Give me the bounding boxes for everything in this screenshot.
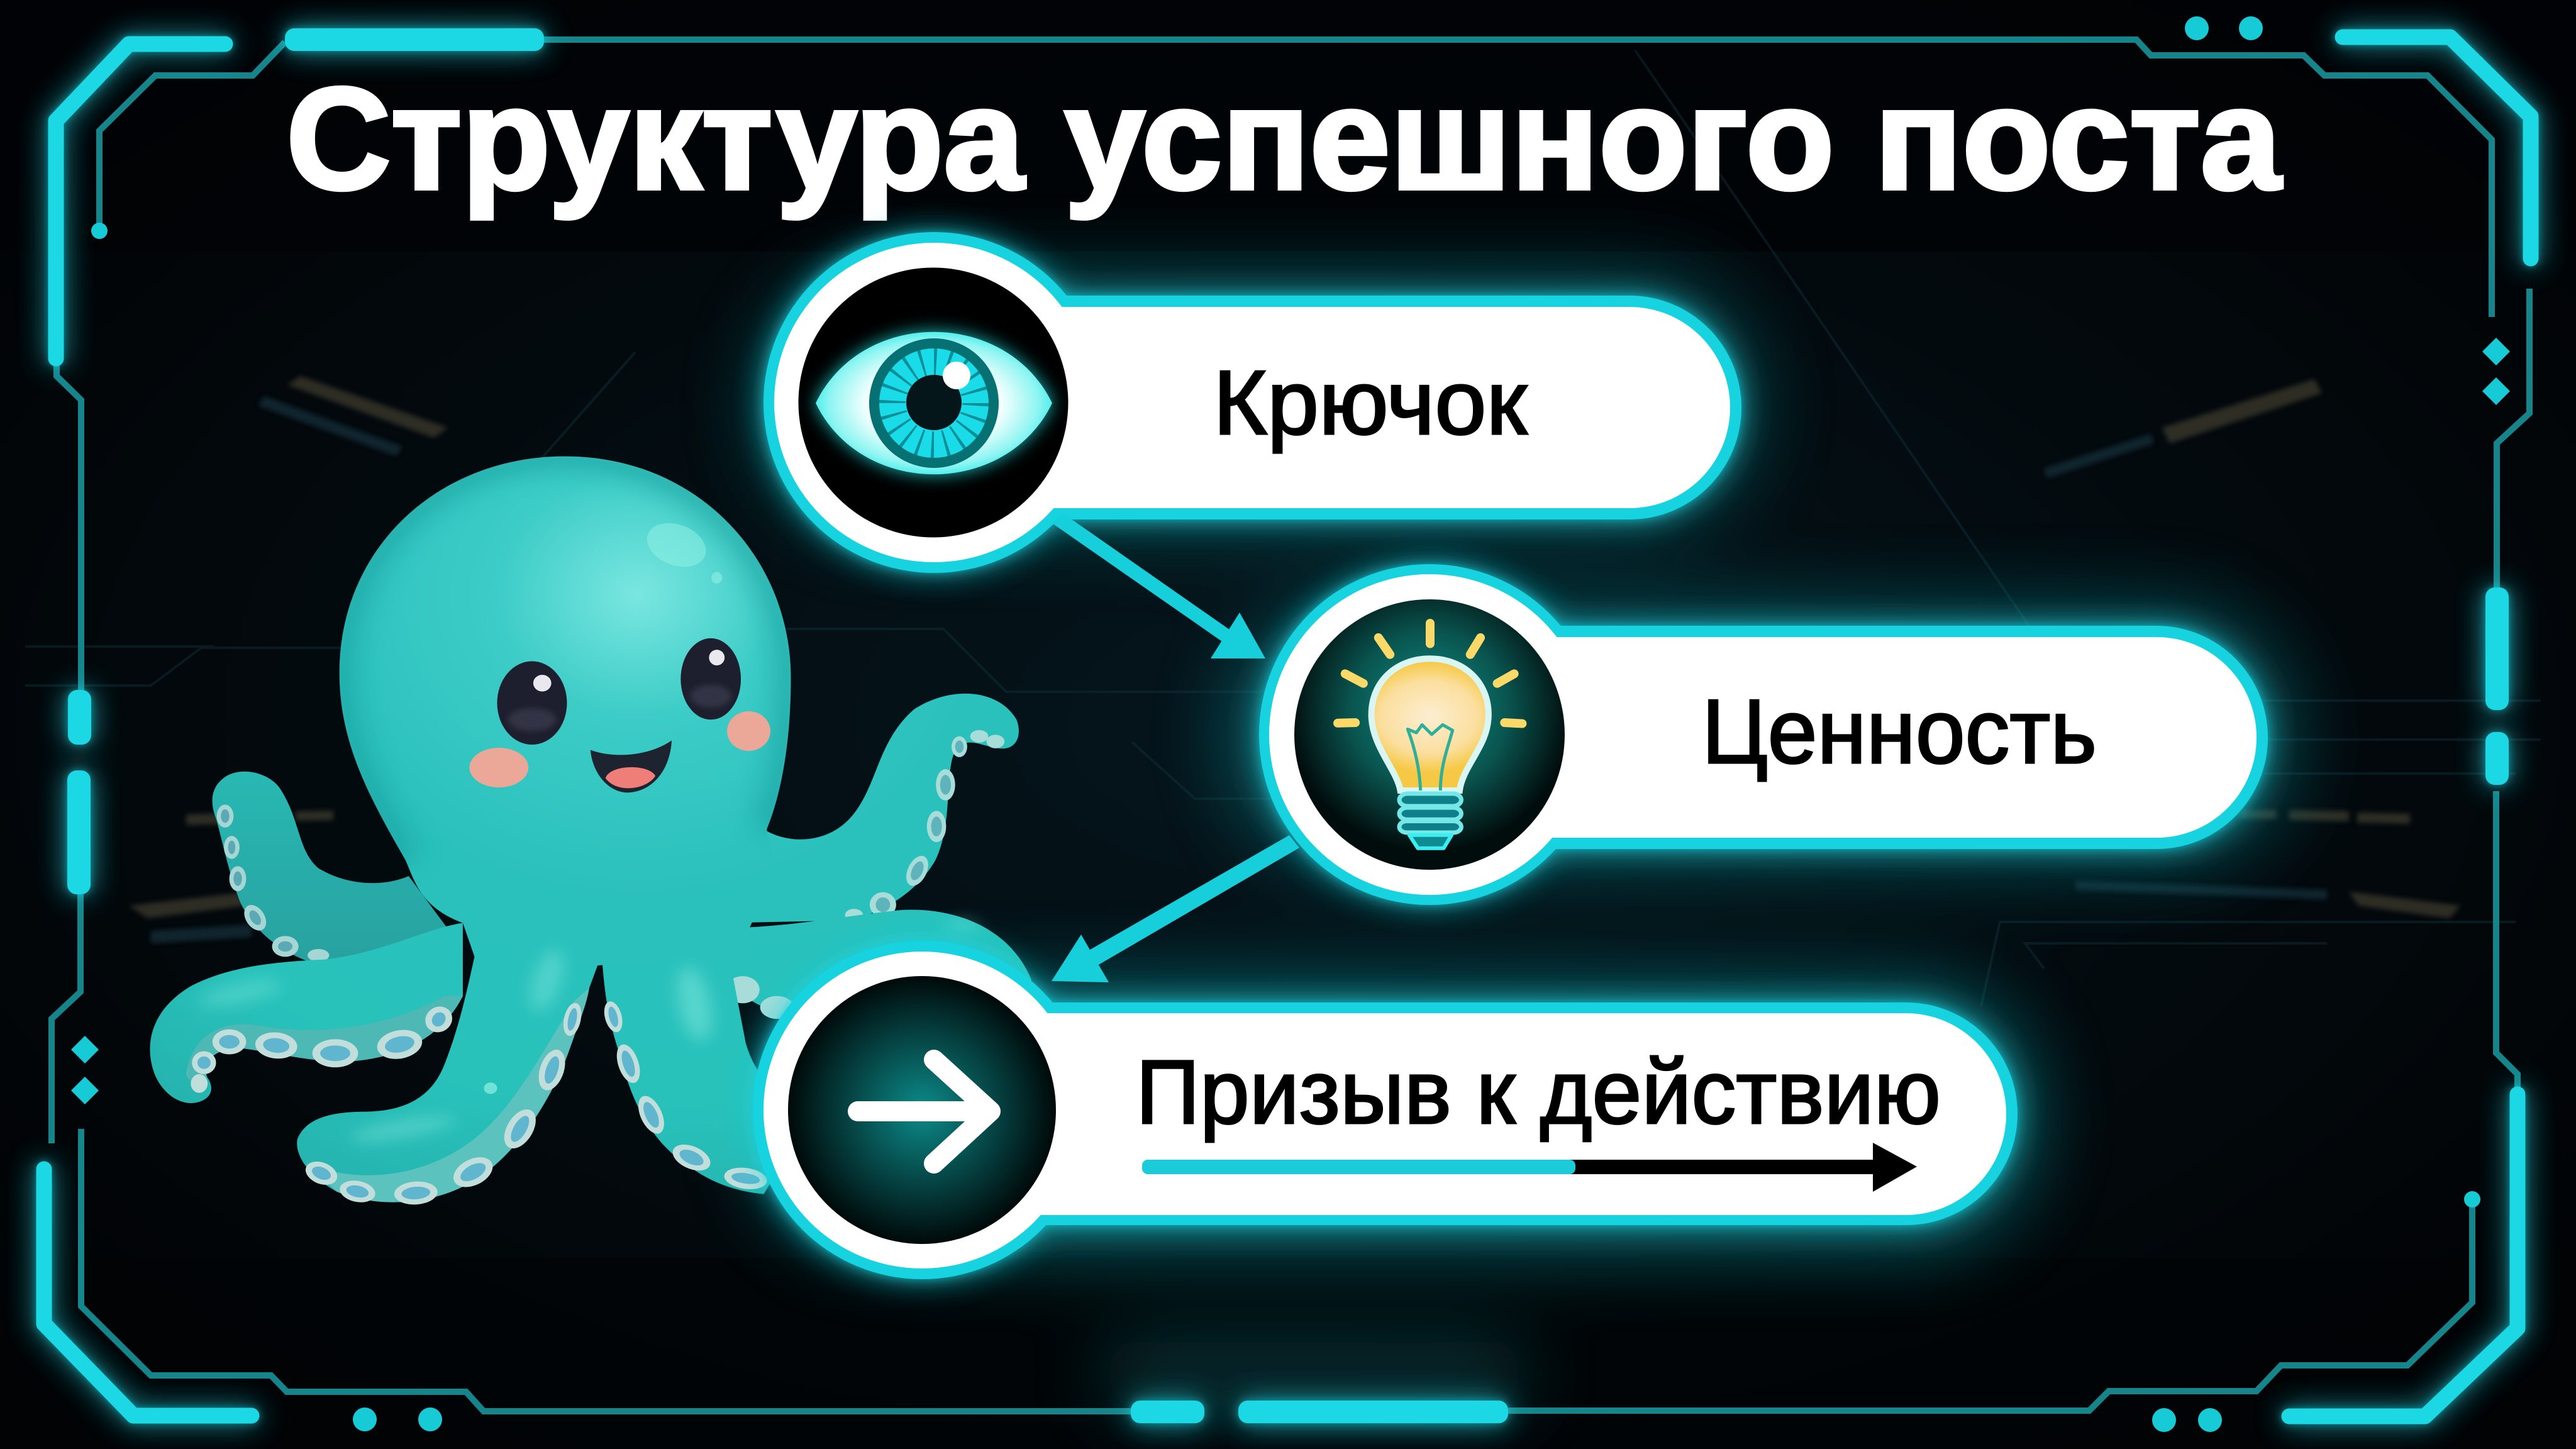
title: Структура успешного поста — [286, 57, 2282, 219]
pill 2 glow and border — [1259, 564, 2268, 905]
pill 1 glow and border — [763, 232, 1741, 573]
arrow: value to call to action — [1052, 835, 1299, 982]
pill 2 white fill — [1269, 574, 2257, 895]
octopus: upper-right arm — [728, 694, 1019, 923]
pill 3 white fill — [763, 952, 2006, 1269]
octopus: head rim shading — [340, 457, 791, 860]
octopus: head and body — [340, 457, 791, 980]
octopus: lower-right arm — [716, 909, 1031, 1019]
octopus: cheeks — [469, 711, 770, 787]
label: Крючок: Крючок — [1213, 352, 1528, 453]
octopus: bottom-right arm — [601, 949, 818, 1194]
octopus: upper-left arm — [213, 772, 463, 967]
octopus mascot — [150, 457, 1031, 1206]
pill 2: value — [1259, 564, 2268, 905]
label: Призыв к действию: Призыв к действию — [1136, 1041, 1941, 1143]
underline arrow — [1142, 1143, 1917, 1192]
label: Ценность: Ценность — [1702, 680, 2097, 782]
pill 1: hook — [763, 232, 1741, 573]
octopus: soft highlights — [196, 514, 980, 1148]
arrow: hook to value — [1052, 513, 1265, 658]
ambient glow behind the pills — [755, 270, 2296, 1409]
icon: arrow — [788, 976, 1056, 1244]
pill 3: call to action — [753, 941, 2018, 1279]
octopus: mouth — [591, 740, 672, 792]
icon: light bulb — [1294, 599, 1565, 870]
octopus: eyes — [497, 638, 741, 745]
icon: eye — [799, 268, 1068, 537]
pill 3 glow and border — [753, 941, 2018, 1279]
octopus: left arm — [150, 923, 463, 1103]
octopus: bottom-left arm — [297, 923, 613, 1206]
pill 1 white fill — [774, 243, 1730, 562]
